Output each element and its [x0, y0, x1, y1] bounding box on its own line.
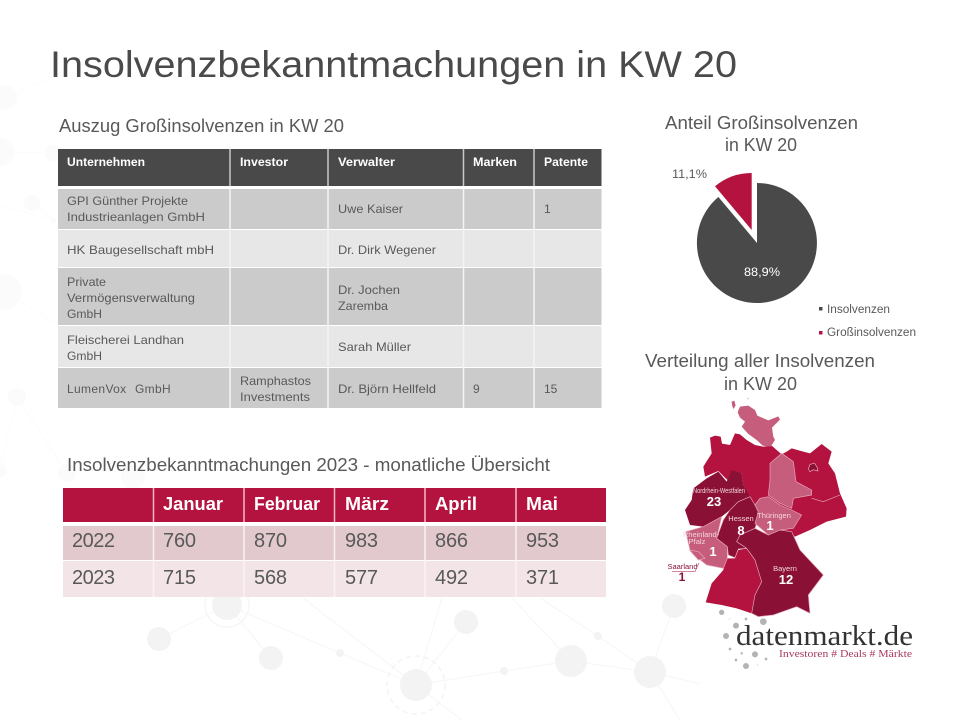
table header row: Verwalter [338, 155, 395, 169]
pie legend: Großinsolvenzen [827, 327, 916, 339]
map labels: 12 [779, 572, 793, 587]
monthly table header: März [345, 494, 389, 514]
logo dots [719, 610, 767, 669]
monthly table rows: 953 [526, 530, 559, 552]
map labels: 1 [709, 544, 717, 559]
region: Baden-Württemberg [706, 548, 762, 613]
table body rows: Ramphastos [240, 374, 311, 388]
region: Berlin [808, 463, 818, 472]
monthly table header: April [435, 494, 477, 514]
map labels: Thüringen [757, 511, 791, 520]
table body rows: 9 [473, 382, 480, 396]
pie chart [672, 167, 817, 303]
map labels: 1 [679, 570, 686, 584]
map labels: Nordrhein-Westfalen [693, 486, 745, 495]
table body rows: Industrieanlagen GmbH [67, 210, 205, 224]
pie legend [819, 304, 916, 339]
table header row: Investor [240, 155, 288, 169]
heading: Auszug Großinsolvenzen: Auszug Großinsolvenzen in KW 20 [59, 116, 344, 136]
map labels: Bayern [773, 564, 797, 573]
monthly table rows: 577 [345, 567, 378, 589]
monthly table rows: 492 [435, 567, 468, 589]
logo: datenmarkt.de: Investoren # Deals # Märkte [779, 649, 912, 660]
heading: Verteilung aller Insolvenzen: Verteilung aller Insolvenzen [645, 351, 875, 371]
monthly table rows [63, 526, 606, 597]
table: monthly overview [63, 488, 606, 597]
monthly table rows: 2023 [72, 567, 115, 589]
monthly table rows: 371 [526, 567, 559, 589]
map labels: Pfalz [689, 537, 706, 546]
monthly table header: Januar [163, 494, 223, 514]
monthly table rows: 2022 [72, 530, 115, 552]
islands [732, 398, 749, 414]
table body rows: GmbH [67, 349, 102, 363]
table body rows [58, 189, 602, 408]
monthly table header [63, 488, 606, 522]
logo: datenmarkt.de [719, 610, 913, 669]
region: Nordrhein-Westfalen [685, 470, 750, 527]
map labels: 1 [766, 518, 774, 533]
heading: Verteilung aller Insolvenzen [645, 351, 875, 394]
heading: Anteil Großinsolvenzen: in KW 20 [725, 135, 797, 155]
monthly table rows: 715 [163, 567, 196, 589]
title: Insolvenzbekanntmachungen in KW 20 [50, 44, 737, 85]
region: Schleswig-Holstein [738, 406, 780, 447]
region: Bayern [735, 528, 823, 617]
region: Saarland [689, 550, 705, 560]
region: North and East base [703, 433, 847, 537]
monthly table rows: 866 [435, 530, 468, 552]
map labels: Rheinland- [683, 530, 720, 539]
monthly table header: Februar [254, 494, 320, 514]
region: Hessen [717, 497, 758, 558]
pie chart: 11,1% [672, 167, 707, 181]
monthly table rows: 983 [345, 530, 378, 552]
table header row: Patente [544, 155, 588, 169]
heading: monatliche Übersicht: Insolvenzbekanntmachungen 2023 - monatliche Übersicht [67, 455, 550, 475]
table body rows: LumenVox [67, 382, 127, 396]
pie legend: Insolvenzen [827, 304, 890, 316]
table body rows: Sarah Müller [338, 340, 411, 354]
background network pattern [0, 75, 700, 720]
logo: datenmarkt.de: datenmarkt.de [736, 621, 913, 652]
table body rows: 1 [544, 202, 551, 216]
table body rows: 15 [544, 382, 558, 396]
heading: Anteil Großinsolvenzen: Anteil Großinsolvenzen [665, 113, 858, 133]
table header row: Unternehmen [67, 155, 145, 169]
table body rows: GPI Günther Projekte [67, 194, 188, 208]
monthly table rows: 568 [254, 567, 287, 589]
map of Germany [667, 398, 847, 617]
region: Thüringen [755, 497, 802, 535]
table body rows: Zaremba [338, 299, 388, 313]
table body rows: HK Baugesellschaft mbH [67, 243, 214, 257]
table header row [58, 149, 602, 186]
region: Rheinland-Pfalz [686, 517, 727, 568]
pie chart: 88,9% [744, 265, 780, 279]
region: Sachsen-Anhalt [768, 453, 812, 508]
map labels: Hessen [728, 514, 754, 523]
map labels [667, 486, 797, 587]
table body rows: Investments [240, 390, 310, 404]
map labels: 23 [707, 494, 721, 509]
monthly table rows: 760 [163, 530, 196, 552]
table body rows: Dr. Dirk Wegener [338, 243, 436, 257]
map labels: Saarland [667, 562, 698, 571]
monthly table header: Mai [526, 494, 558, 514]
map labels: 8 [737, 523, 745, 538]
heading: Anteil Großinsolvenzen [665, 113, 858, 155]
table body rows: Private [67, 275, 106, 289]
table body rows: Fleischerei Landhan [67, 333, 184, 347]
table: Großinsolvenzen [58, 149, 602, 408]
table body rows: Dr. Jochen [338, 283, 400, 297]
table body rows: Dr. Björn Hellfeld [338, 382, 436, 396]
table body rows: GmbH [67, 307, 102, 321]
heading: Verteilung aller Insolvenzen: in KW 20 [724, 374, 797, 394]
table header row: Marken [473, 155, 517, 169]
table body rows: Uwe Kaiser [338, 202, 403, 216]
table body rows: Vermögensverwaltung [67, 291, 195, 305]
monthly table rows: 870 [254, 530, 287, 552]
region: Sachsen border line [812, 495, 840, 502]
table body rows: GmbH [135, 382, 171, 396]
